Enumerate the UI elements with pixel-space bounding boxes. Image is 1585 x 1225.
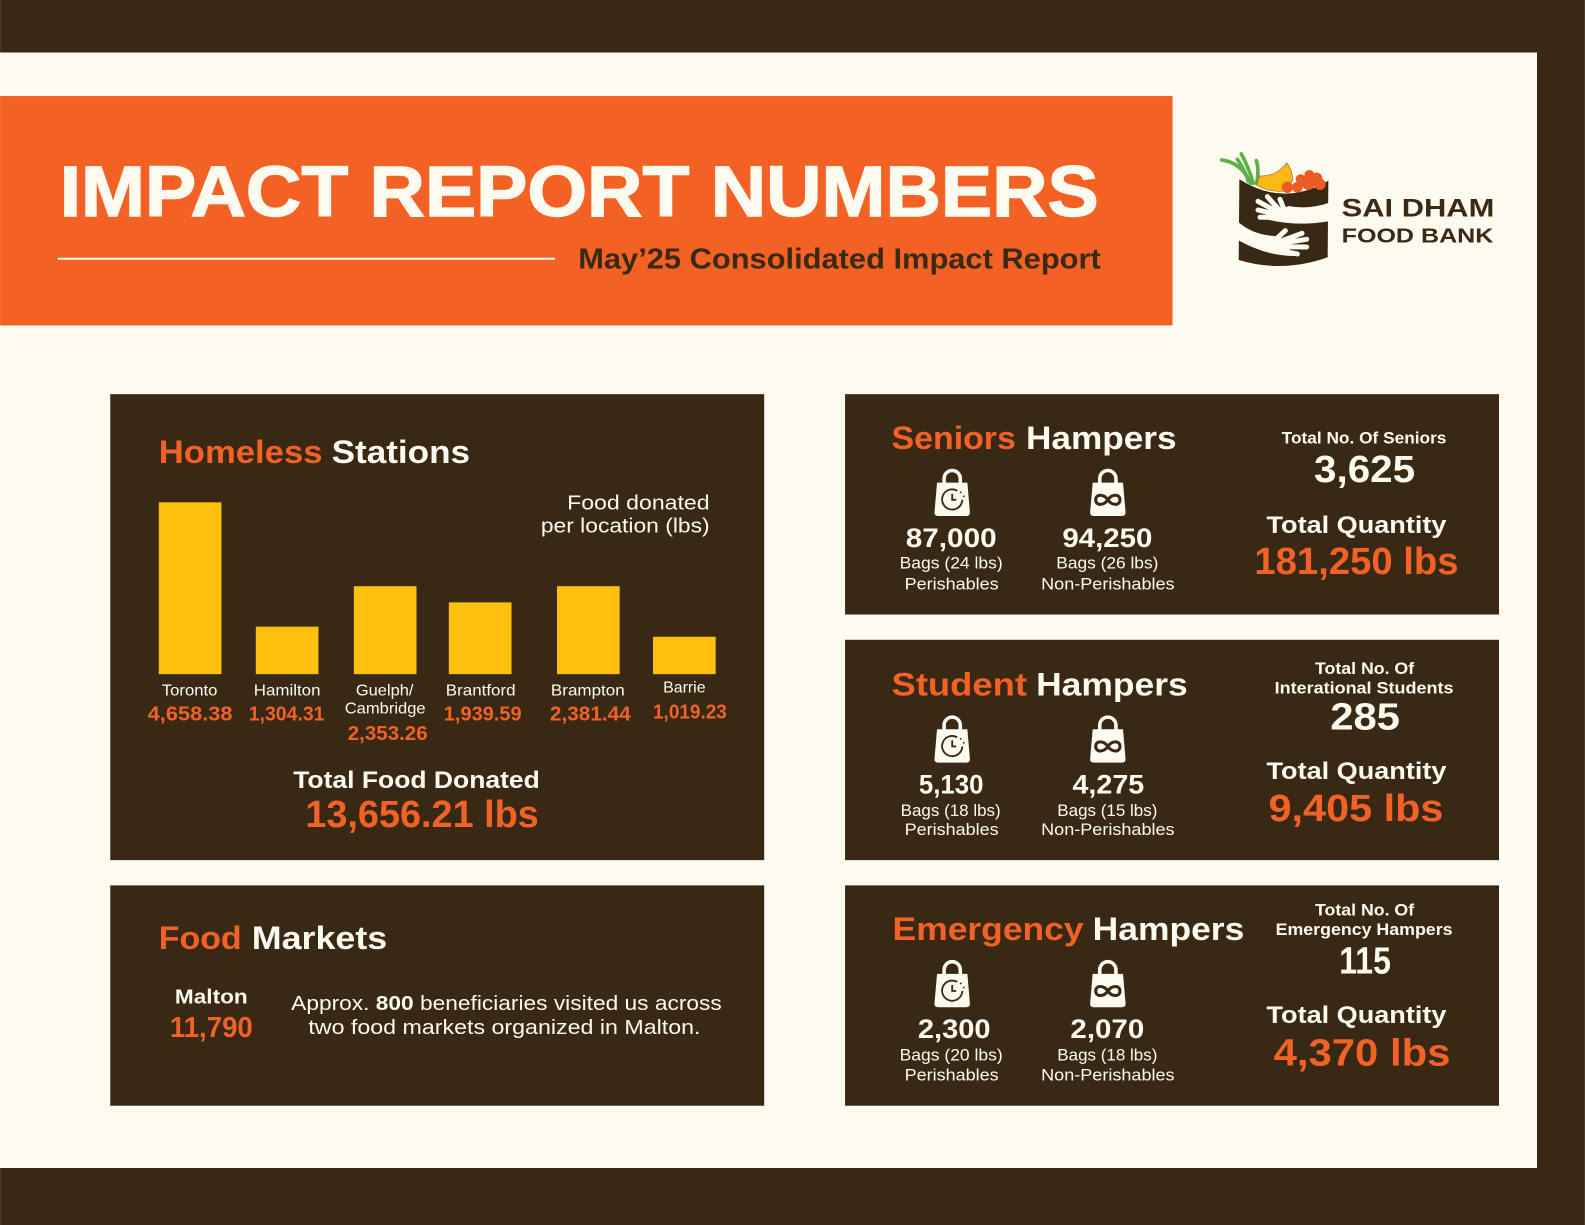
bar labels: Barrie [663,679,706,696]
heading: Hampers [1036,666,1188,702]
non-perishables stat: 94,250 [1062,522,1152,553]
heading [159,920,387,956]
perishables stat: Bags (24 lbs) [900,555,1003,573]
total quantity: Total Quantity [1267,1002,1447,1029]
title: IMPACT REPORT NUMBERS [60,152,1099,232]
beneficiaries note [291,993,722,1039]
non-perishables stat: Non-Perishables [1041,1066,1175,1084]
heading [892,420,1177,456]
bar labels: Hamilton [254,682,320,699]
chart caption: Food donated [567,492,710,514]
total students: Interational Students [1275,678,1454,697]
non-perishables stat: Bags (15 lbs) [1057,802,1157,820]
bar values: 1,019.23 [653,702,727,724]
bar labels: Brantford [446,682,516,699]
icon: non-perishable bag [1090,962,1126,1007]
heading: Food [159,920,242,956]
chart caption [541,492,710,538]
non-perishables stat [1041,768,1175,839]
heading: Student [892,666,1027,702]
total quantity: 4,370 lbs [1274,1031,1450,1074]
subtitle: May’25 Consolidated Impact Report [578,243,1101,275]
subtitle rule [58,258,555,260]
Malton stat [170,987,253,1043]
total seniors: Total No. Of Seniors [1282,429,1446,448]
logo: Sai Dham Food Bank [1222,154,1494,266]
non-perishables stat: Bags (26 lbs) [1056,555,1158,573]
total students: Total No. Of [1315,659,1415,678]
icon: non-perishable bag [1090,470,1126,516]
non-perishables stat: 4,275 [1072,768,1144,799]
perishables stat: 2,300 [918,1013,991,1044]
total food donated: 13,656.21 lbs [305,793,539,836]
heading [893,911,1244,947]
perishables stat: 5,130 [919,768,984,799]
heading: Emergency [893,911,1084,947]
panel: homeless stations [110,394,764,860]
perishables stat: Bags (20 lbs) [900,1046,1003,1064]
panel: seniors hampers [845,394,1499,615]
heading: Hampers [1026,420,1177,456]
perishables stat: Perishables [905,821,999,839]
bar labels: Cambridge [345,701,426,718]
heading: Markets [252,920,387,956]
bar values: 2,381.44 [550,704,632,726]
total food donated [293,767,540,836]
perishables stat: 87,000 [906,522,997,553]
header banner [0,96,1173,325]
non-perishables stat: 2,070 [1070,1013,1144,1044]
total emergency hampers: Total No. Of [1315,901,1415,920]
bar labels: Guelph/ [356,682,414,699]
non-perishables stat: Bags (18 lbs) [1057,1046,1157,1064]
total quantity [1267,1002,1450,1074]
total students [1275,659,1454,739]
non-perishables stat [1041,1013,1175,1084]
heading: Homeless [159,434,323,470]
perishables stat: Perishables [905,1066,999,1084]
beneficiaries note: Approx. 800 beneficiaries visited us across [291,993,722,1015]
logo wordmark: FOOD BANK [1342,225,1493,248]
panel: student hampers [845,640,1499,860]
bar values [148,702,727,745]
Malton stat: 11,790 [170,1011,253,1043]
heading: Hampers [1093,911,1244,947]
logo wordmark [1342,195,1494,248]
total emergency hampers: Emergency Hampers [1276,920,1453,939]
panel: emergency hampers [845,885,1499,1106]
total quantity: 181,250 lbs [1254,540,1459,583]
bar labels [162,679,706,718]
panel: food markets [110,885,764,1106]
icon: non-perishable bag [1090,717,1126,763]
total seniors: 3,625 [1314,448,1415,491]
non-perishables stat [1041,522,1175,593]
icon: hugging arms [1236,197,1331,256]
total students: 285 [1330,696,1400,739]
logo wordmark: SAI DHAM [1342,195,1494,223]
icon: greens [1222,154,1258,183]
perishables stat [900,522,1003,593]
bar values: 1,939.59 [444,704,522,726]
bar labels: Brampton [551,682,625,699]
icon: perishable bag [934,962,970,1007]
non-perishables stat: Non-Perishables [1041,821,1175,839]
total emergency hampers [1276,901,1453,982]
icon: perishable bag [934,717,970,763]
total quantity [1254,512,1459,583]
total quantity: 9,405 lbs [1269,787,1443,830]
total quantity [1267,758,1447,830]
total quantity: Total Quantity [1267,758,1447,785]
Malton stat: Malton [175,987,248,1009]
bar values: 1,304.31 [249,704,325,726]
perishables stat [901,768,1001,839]
non-perishables stat: Non-Perishables [1041,575,1175,593]
icon: tomatoes [1282,170,1326,193]
total food donated: Total Food Donated [293,767,540,794]
heading [892,666,1188,702]
heading [159,434,470,470]
perishables stat [900,1013,1003,1084]
icon: bag [1239,179,1328,266]
heading: Seniors [892,420,1016,456]
perishables stat: Perishables [905,575,999,593]
bar labels: Toronto [162,682,218,699]
heading: Stations [332,434,470,470]
perishables stat: Bags (18 lbs) [901,802,1001,820]
icon: bananas [1257,163,1293,191]
total emergency hampers: 115 [1339,939,1391,982]
total quantity: Total Quantity [1267,512,1447,539]
bar values: 2,353.26 [348,723,428,745]
chart caption: per location (lbs) [541,516,710,538]
bar values: 4,658.38 [148,704,233,726]
icon: perishable bag [934,470,970,516]
beneficiaries note: two food markets organized in Malton. [308,1017,701,1039]
total seniors [1282,429,1446,491]
bar chart [148,502,727,745]
